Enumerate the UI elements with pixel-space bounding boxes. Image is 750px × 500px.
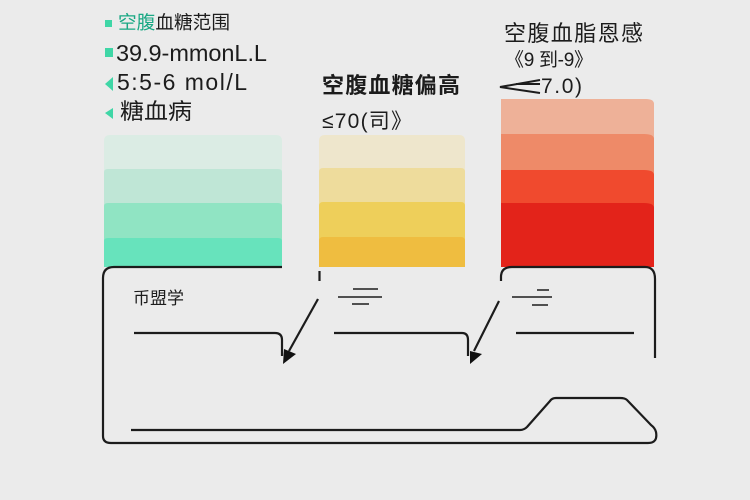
- marker: row 1: [105, 20, 112, 27]
- heading: normal fasting glucose: 空腹血糖范围: [118, 12, 230, 33]
- value: 7.0: 7.0): [541, 75, 582, 98]
- heading: impaired fasting glucose: 空腹血糖偏高: [322, 73, 460, 98]
- chart: red stacked bar: [501, 99, 654, 267]
- panel: middle range heading: [322, 73, 460, 133]
- chart: green stacked bar: [104, 135, 282, 267]
- line: right box rule: [516, 332, 634, 334]
- panel: normal range legend text: [105, 12, 267, 124]
- arrow: red to middle: [470, 301, 499, 364]
- line: middle box rule with step: [334, 333, 468, 356]
- marker: row 3: [105, 77, 113, 91]
- panel: outer outline with bump: [103, 267, 656, 443]
- icon: greater-than-or-equal sign: [500, 80, 540, 93]
- value: 9 range: 《9 到-9》: [505, 49, 593, 71]
- panel: high range heading: [500, 21, 643, 98]
- chart: yellow stacked bar: [319, 135, 465, 267]
- label: row 4: 糖血病: [120, 99, 192, 124]
- label: left box: 币盟学: [133, 289, 184, 308]
- marker: row 2: [105, 48, 113, 57]
- icon: middle text lines: [338, 289, 382, 304]
- stroke: middle box tick: [318, 271, 321, 281]
- panel: right box outline: [501, 267, 655, 358]
- line: left box rule with step: [134, 333, 282, 356]
- value: 7.0 range: ≤70(司》: [322, 110, 412, 133]
- icon: right text lines: [512, 290, 552, 305]
- value: 5.5-6 mmol/L: 5:5-6 mol/L: [117, 69, 247, 95]
- arrow: yellow to left: [283, 299, 318, 364]
- marker: row 4: [105, 108, 113, 119]
- heading: diabetes fasting glucose: 空腹血脂恩感: [504, 21, 643, 46]
- value: 3.9 mmol/L: 39.9-mmonL.L: [116, 40, 267, 66]
